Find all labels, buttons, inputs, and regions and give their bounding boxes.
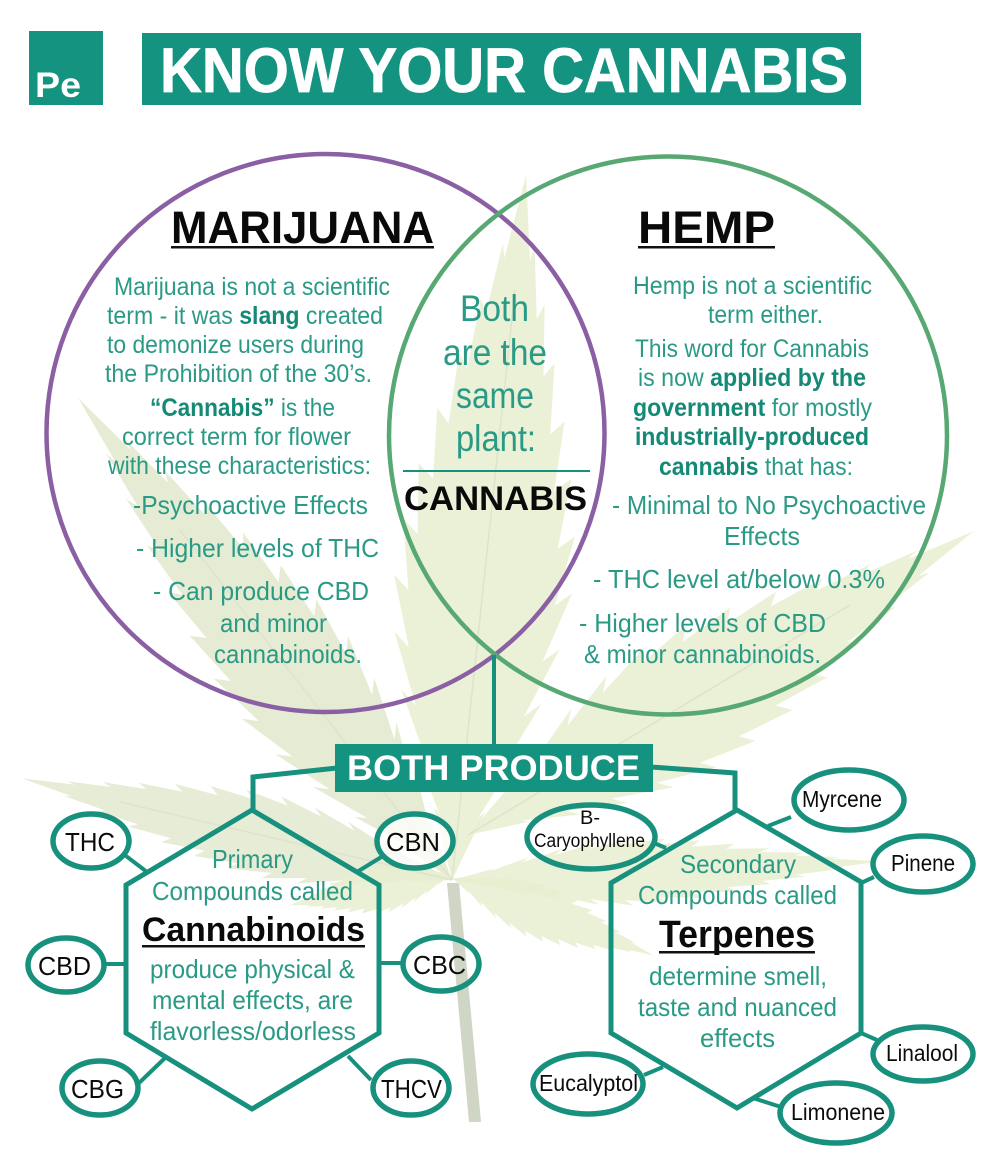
connector: venn to both produce [492, 655, 496, 746]
cannabinoids description [150, 954, 356, 1046]
marijuana description: term - it was slang created [107, 302, 383, 330]
hemp characteristics [579, 490, 926, 669]
terpenes intro: Compounds called [638, 880, 837, 910]
title: KNOW YOUR CANNABIS [160, 36, 848, 106]
same plant statement: same [456, 375, 534, 416]
marijuana characteristics: -Psychoactive Effects [133, 490, 368, 520]
oval: Limonene: Limonene [791, 1099, 885, 1125]
hemp characteristics: Effects [724, 521, 800, 551]
terpenes description: determine smell, [649, 961, 827, 991]
hemp characteristics: & minor cannabinoids. [584, 639, 821, 669]
oval: B-Caryophyllene: B- [580, 808, 600, 829]
venn circle: hemp [389, 156, 947, 714]
same plant statement: are the [443, 332, 547, 373]
cannabinoids intro: Primary [212, 844, 293, 874]
oval: THCV: THCV [381, 1074, 443, 1104]
same plant statement: Both [460, 288, 529, 329]
oval: Myrcene [794, 770, 904, 830]
terpenes intro [638, 849, 837, 910]
cannabis label: CANNABIS [404, 480, 587, 518]
oval: Eucalyptol: Eucalyptol [539, 1070, 638, 1096]
oval: Pinene [873, 836, 973, 892]
cannabinoid connectors [105, 856, 403, 1083]
oval: THCV [373, 1061, 449, 1115]
terpenes description [638, 961, 837, 1053]
oval: B-Caryophyllene: Caryophyllene [534, 831, 645, 852]
panel: cannabinoids hexagon [126, 810, 379, 1109]
marijuana description: Marijuana is not a scientific [114, 273, 390, 301]
same plant statement [443, 288, 547, 459]
marijuana characteristics: - Can produce CBD [153, 576, 369, 606]
terpenes description: effects [700, 1023, 775, 1053]
cannabinoids description: flavorless/odorless [150, 1016, 356, 1046]
same plant statement: plant: [456, 418, 536, 459]
marijuana characteristics [133, 490, 379, 669]
oval: CBD [28, 938, 104, 992]
panel: marijuana text [105, 202, 434, 669]
terpenes intro: Secondary [680, 849, 796, 879]
oval: Linalool: Linalool [886, 1040, 958, 1066]
venn circle: marijuana [46, 154, 604, 712]
oval: Limonene [780, 1083, 892, 1143]
oval: CBG [62, 1061, 138, 1115]
marijuana description: “Cannabis” is the [150, 394, 335, 422]
oval: Eucalyptol [533, 1054, 643, 1114]
oval: Linalool [873, 1027, 973, 1081]
marijuana characteristics: - Higher levels of THC [136, 533, 379, 563]
oval: THC [53, 814, 129, 868]
hemp description: industrially-produced [635, 423, 869, 451]
heading: marijuana: MARIJUANA [171, 202, 434, 253]
cannabinoids description: produce physical & [150, 954, 355, 984]
oval: Pinene: Pinene [891, 850, 955, 876]
oval: Myrcene: Myrcene [802, 786, 882, 812]
panel: terpenes hexagon [611, 810, 861, 1108]
marijuana characteristics: cannabinoids. [214, 639, 362, 669]
marijuana description: the Prohibition of the 30’s. [105, 360, 372, 388]
heading: hemp: HEMP [638, 202, 775, 253]
hemp description: This word for Cannabis [635, 335, 869, 363]
hemp description [633, 272, 872, 481]
hemp characteristics: - THC level at/below 0.3% [593, 564, 885, 594]
oval: THC: THC [65, 827, 115, 857]
panel: overlap text [403, 288, 590, 518]
hemp characteristics: - Higher levels of CBD [579, 608, 826, 638]
logo: Pe: Pe [35, 66, 81, 105]
oval: CBG: CBG [71, 1074, 124, 1104]
oval: B-Caryophyllene [527, 805, 655, 869]
heading: terpenes: Terpenes [659, 914, 815, 956]
marijuana description: with these characteristics: [107, 452, 371, 480]
hemp description: government for mostly [633, 394, 872, 422]
hemp description: Hemp is not a scientific [633, 272, 872, 300]
terpene connectors [644, 817, 877, 1107]
cannabinoids description: mental effects, are [152, 985, 353, 1015]
hemp description: term either. [708, 301, 823, 329]
terpenes description: taste and nuanced [638, 992, 837, 1022]
hemp description: cannabis that has: [659, 453, 853, 481]
hemp description: is now applied by the [638, 364, 866, 392]
marijuana description: to demonize users during [107, 331, 364, 359]
cannabinoids intro: Compounds called [152, 876, 353, 906]
panel: hemp text [579, 202, 926, 669]
oval: CBN [377, 814, 453, 868]
marijuana characteristics: and minor [220, 608, 327, 638]
oval: CBN: CBN [386, 827, 440, 857]
hemp characteristics: - Minimal to No Psychoactive [612, 490, 926, 520]
heading: cannabinoids: Cannabinoids [142, 911, 365, 949]
cannabinoids intro [152, 844, 353, 906]
logo: Pe [29, 31, 103, 105]
oval: CBC [403, 937, 479, 991]
marijuana description: correct term for flower [122, 423, 351, 451]
oval: CBC: CBC [413, 950, 466, 980]
banner: both produce: BOTH PRODUCE [347, 749, 640, 788]
oval: CBD: CBD [38, 951, 91, 981]
marijuana description [105, 273, 390, 480]
connector: both produce to hexagons [253, 767, 735, 812]
